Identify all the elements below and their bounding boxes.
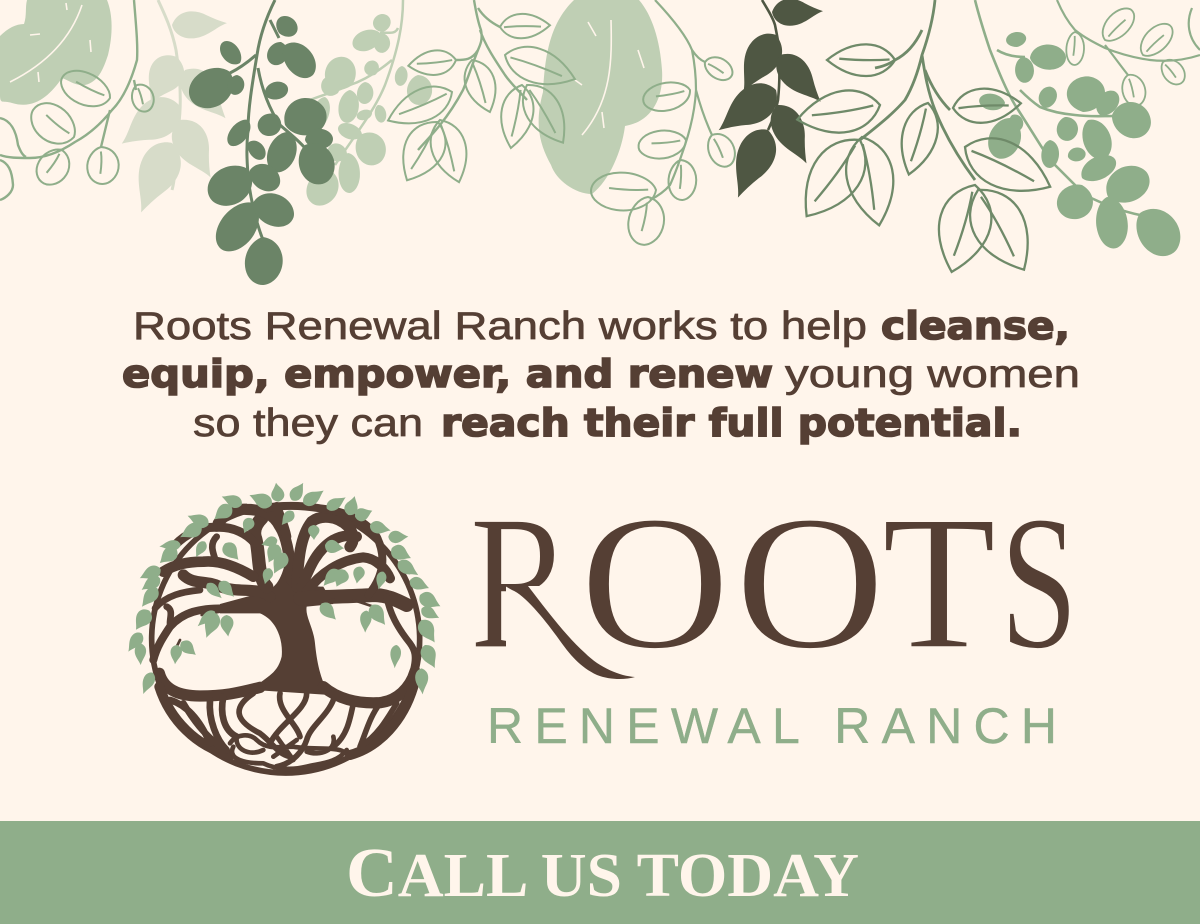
line 1: cleanse, bbox=[881, 304, 1070, 348]
line 3: reach their full potential. bbox=[441, 401, 1022, 445]
tree trunk, branches and roots bbox=[152, 505, 420, 773]
letters OOTS: S bbox=[1000, 476, 1078, 689]
foliage banner bbox=[0, 0, 1200, 285]
dark olive sprig bbox=[708, 0, 831, 205]
pale grey-green sprig bbox=[110, 0, 237, 220]
tree leaves bbox=[123, 480, 444, 696]
call us today: CALL US TODAY bbox=[346, 835, 859, 912]
line 2: equip, empower, and renew bbox=[122, 352, 773, 396]
centre-left outline vine bbox=[382, 0, 581, 190]
letter R with long tail bbox=[474, 522, 635, 679]
top right thin vine bbox=[1057, 0, 1200, 109]
line 1 bbox=[133, 304, 1070, 348]
right filled green vine bbox=[975, 0, 1191, 265]
centre-right outline vine bbox=[590, 0, 741, 246]
line 1: Roots Renewal Ranch works to help bbox=[133, 305, 867, 348]
Renewal Ranch subtitle: RENEWAL RANCH bbox=[487, 698, 1057, 754]
call to action band bbox=[0, 821, 1200, 924]
pale blob leaf centre bbox=[539, 0, 662, 194]
left outline vine bbox=[0, 0, 158, 200]
letters OOTS: O bbox=[580, 476, 730, 689]
dark green rounded vine bbox=[181, 0, 343, 285]
pale blob leaf left bbox=[0, 0, 112, 105]
large dark outline vine bbox=[787, 0, 1060, 282]
letters OOTS bbox=[580, 476, 1078, 689]
ROOTS wordmark bbox=[474, 520, 1069, 744]
line 3 bbox=[193, 401, 1022, 445]
pale green rounded sprig bbox=[301, 0, 433, 211]
line 2 bbox=[122, 352, 1080, 396]
letter R with long tail: R bbox=[470, 476, 572, 689]
tree of life logo bbox=[128, 482, 440, 776]
line 3: so they can bbox=[193, 402, 423, 445]
letters OOTS: T bbox=[882, 476, 996, 689]
line 2: young women bbox=[785, 353, 1080, 396]
letters OOTS: O bbox=[735, 476, 885, 689]
